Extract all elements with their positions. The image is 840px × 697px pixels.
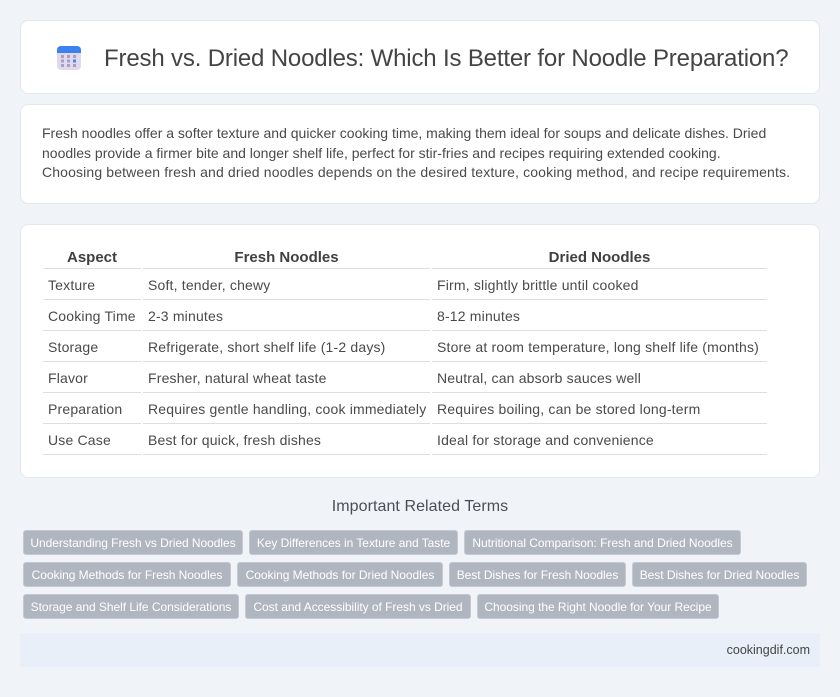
- title: Fresh vs. Dried Noodles: Which Is Better for Noodle Preparation?: [104, 45, 788, 72]
- panel: comparison table: [20, 224, 820, 478]
- related term chips: Best Dishes for Dried Noodles: [640, 568, 799, 582]
- related term chips: Storage and Shelf Life Considerations: [31, 600, 231, 614]
- related term chips: Key Differences in Texture and Taste: [257, 536, 450, 550]
- panel: title header: [20, 20, 820, 94]
- row: preparation: Requires boiling, can be stored long-term: [437, 401, 700, 417]
- row: preparation: [48, 401, 700, 417]
- row: flavor: Fresher, natural wheat taste: [148, 370, 327, 386]
- row: texture: Texture: [48, 277, 95, 293]
- icon: calendar: [57, 46, 81, 70]
- row: texture: [48, 277, 639, 293]
- related term chips: Best Dishes for Fresh Noodles: [457, 568, 618, 582]
- row: storage: Store at room temperature, long shelf life (months): [437, 339, 759, 355]
- row: flavor: [48, 370, 641, 386]
- related term chips: Understanding Fresh vs Dried Noodles: [30, 536, 236, 550]
- table header: [67, 249, 650, 266]
- row: cooking time: 8-12 minutes: [437, 308, 520, 324]
- intro text: noodles provide a firmer bite and longer shelf life, perfect for stir-fries and recipes requiring extended cooking.: [42, 144, 721, 160]
- footer: [20, 633, 820, 667]
- row: use case: [48, 432, 654, 448]
- row: use case: Best for quick, fresh dishes: [148, 432, 321, 448]
- row: texture: Soft, tender, chewy: [148, 277, 270, 293]
- table header: Dried Noodles: [549, 249, 650, 266]
- row: use case: Use Case: [48, 432, 111, 448]
- row: storage: [48, 339, 759, 355]
- related term chips: Cooking Methods for Dried Noodles: [246, 568, 434, 582]
- row: cooking time: [48, 308, 520, 324]
- related term chips: Cost and Accessibility of Fresh vs Dried: [253, 600, 463, 614]
- related term chips: [23, 530, 807, 619]
- related term chips: Cooking Methods for Fresh Noodles: [32, 568, 222, 582]
- row: use case: Ideal for storage and convenience: [437, 432, 654, 448]
- row: storage: Storage: [48, 339, 98, 355]
- related term chips: Choosing the Right Noodle for Your Recipe: [484, 600, 712, 614]
- footer source: cookingdif.com: [727, 643, 810, 657]
- row: cooking time: Cooking Time: [48, 308, 136, 324]
- intro text: [42, 125, 790, 180]
- panel: introduction: [20, 104, 820, 204]
- row: cooking time: 2-3 minutes: [148, 308, 223, 324]
- comparison table: [43, 249, 767, 455]
- related term chips: Nutritional Comparison: Fresh and Dried Noodles: [472, 536, 733, 550]
- row: texture: Firm, slightly brittle until cooked: [437, 277, 639, 293]
- intro text: Choosing between fresh and dried noodles depends on the desired texture, cooking method, and recipe requirements.: [42, 164, 790, 180]
- row: storage: Refrigerate, short shelf life (1-2 days): [148, 339, 386, 355]
- table header: Aspect: [67, 249, 117, 266]
- intro text: Fresh noodles offer a softer texture and quicker cooking time, making them ideal for soups and delicate dishes. Dried: [42, 125, 766, 141]
- table header: Fresh Noodles: [234, 249, 339, 266]
- row: flavor: Flavor: [48, 370, 88, 386]
- row: flavor: Neutral, can absorb sauces well: [437, 370, 641, 386]
- row: preparation: Preparation: [48, 401, 122, 417]
- heading: related terms: Important Related Terms: [332, 498, 508, 515]
- row: preparation: Requires gentle handling, cook immediately: [148, 401, 426, 417]
